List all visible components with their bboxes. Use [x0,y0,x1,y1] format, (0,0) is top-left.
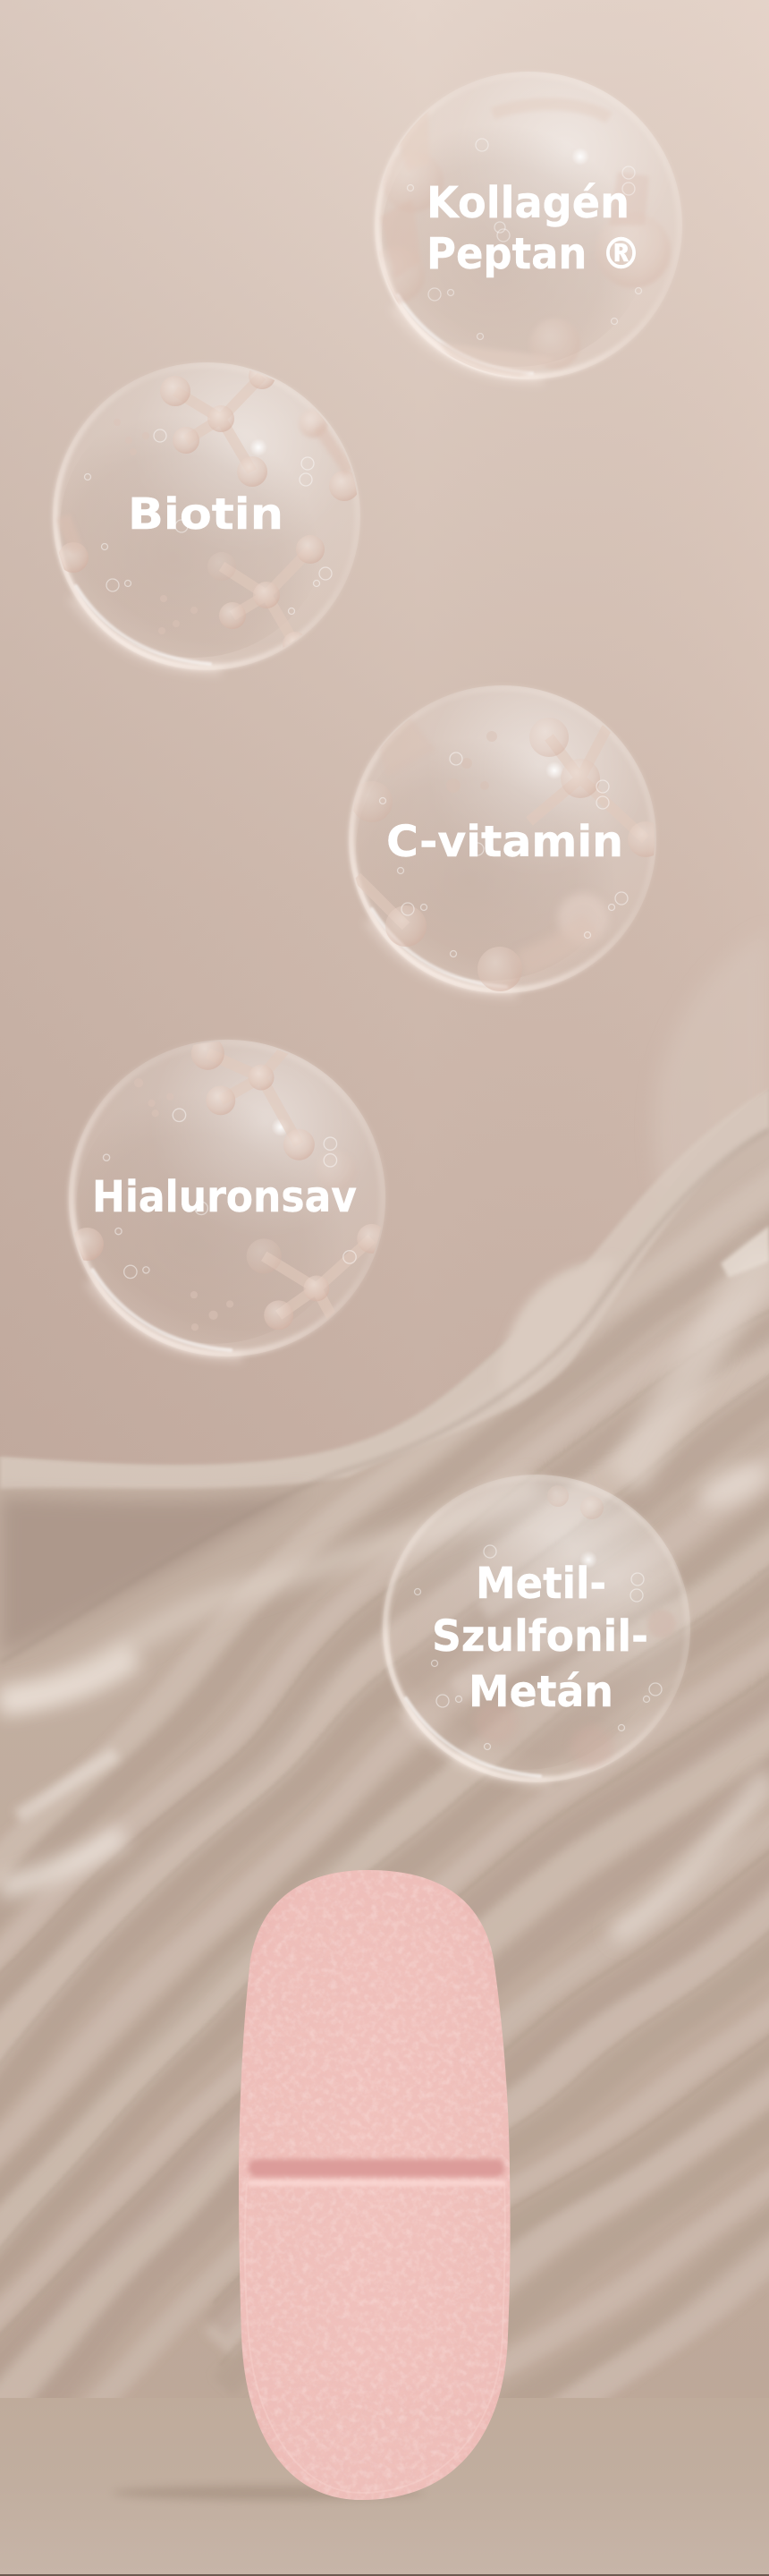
tablet shadow on floor [112,2486,425,2500]
bubble: Kollagén Peptan [368,72,682,379]
bubble: Metil-Szulfonil-Metán [383,1475,690,1782]
label: Metil-Szulfonil-Metán [432,1559,648,1717]
pink tablet [232,1866,519,2505]
bubble: C-vitamin [349,685,663,993]
label: Metil-Szulfonil-Metán: Metil- [476,1559,606,1609]
label: Hialuronsav: Hialuronsav [92,1172,357,1222]
label: C-vitamin: C-vitamin [386,817,623,867]
label: Kollagén Peptan: Peptan ® [427,229,641,279]
floor [0,2398,769,2576]
label: Kollagén Peptan: Kollagén [427,178,630,228]
silk fabric waves [0,931,769,2532]
label: Kollagén Peptan [427,178,641,279]
bubble: Hialuronsav [69,1037,386,1356]
bubble: Biotin [53,362,360,670]
label: Metil-Szulfonil-Metán: Metán [469,1667,613,1717]
label: Metil-Szulfonil-Metán: Szulfonil- [432,1611,648,1662]
label: Biotin: Biotin [128,489,283,540]
